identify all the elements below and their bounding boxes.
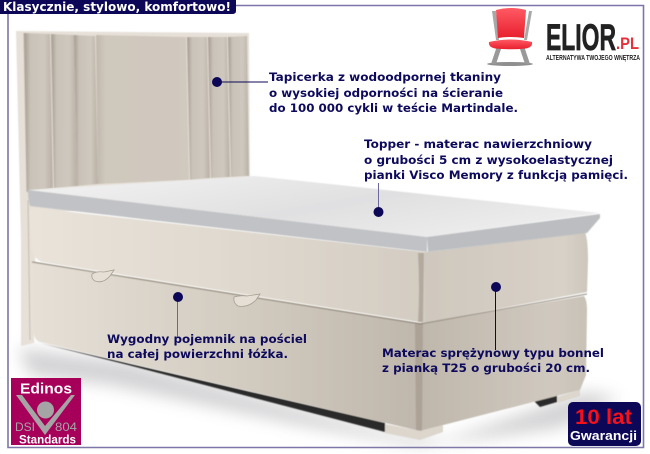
upper mattress: [30, 208, 588, 324]
callout: bonnel mattress: Materac sprężynowy typu bonnel: [382, 346, 604, 360]
logo domain: .PL: [616, 34, 639, 53]
lower base with storage: [32, 260, 587, 440]
callout: storage: na całej powierzchni łóżka.: [107, 347, 288, 361]
badge: 10 lat warranty: 10 lat: [575, 406, 632, 429]
logo: Elior: [487, 8, 640, 66]
headboard: [16, 31, 250, 346]
callout: topper: o grubości 5 cm z wysokoelastycznej: [364, 153, 613, 167]
badge: Edinos DSI 804: DSI: [15, 420, 35, 434]
callout: storage: Wygodny pojemnik na pościel: [107, 332, 307, 346]
callout: storage: [107, 292, 307, 361]
callout: topper: Topper - materac nawierzchniowy: [364, 137, 593, 151]
icon: chair: [487, 8, 533, 66]
banner title: Klasycznie, stylowo, komfortowo!: [3, 0, 231, 14]
callout: topper: pianki Visco Memory z funkcją pamięci.: [364, 168, 628, 182]
callout: bonnel mattress: [382, 282, 604, 375]
banner: [0, 0, 236, 14]
badge: Edinos DSI 804: 804: [55, 420, 77, 434]
badge: Edinos DSI 804: Edinos: [20, 380, 72, 398]
badge: Edinos DSI 804: [11, 378, 81, 446]
callout: upholstery: do 100 000 cykli w teście Martindale.: [269, 101, 518, 115]
badge: Edinos DSI 804: Standards: [19, 432, 76, 446]
callout: topper: [364, 137, 628, 217]
callout: upholstery: [212, 70, 518, 115]
floor shadow: [18, 348, 620, 446]
badge: 10 lat warranty: Gwarancji: [570, 428, 637, 443]
callout: upholstery: o wysokiej odporności na ścieranie: [269, 86, 503, 100]
topper: [28, 176, 600, 252]
callout: bonnel mattress: z pianką T25 o grubości 20 cm.: [382, 361, 590, 375]
callout: upholstery: Tapicerka z wodoodpornej tkaniny: [269, 70, 502, 84]
handles: [92, 270, 260, 306]
badge: 10 lat warranty: [568, 402, 641, 446]
